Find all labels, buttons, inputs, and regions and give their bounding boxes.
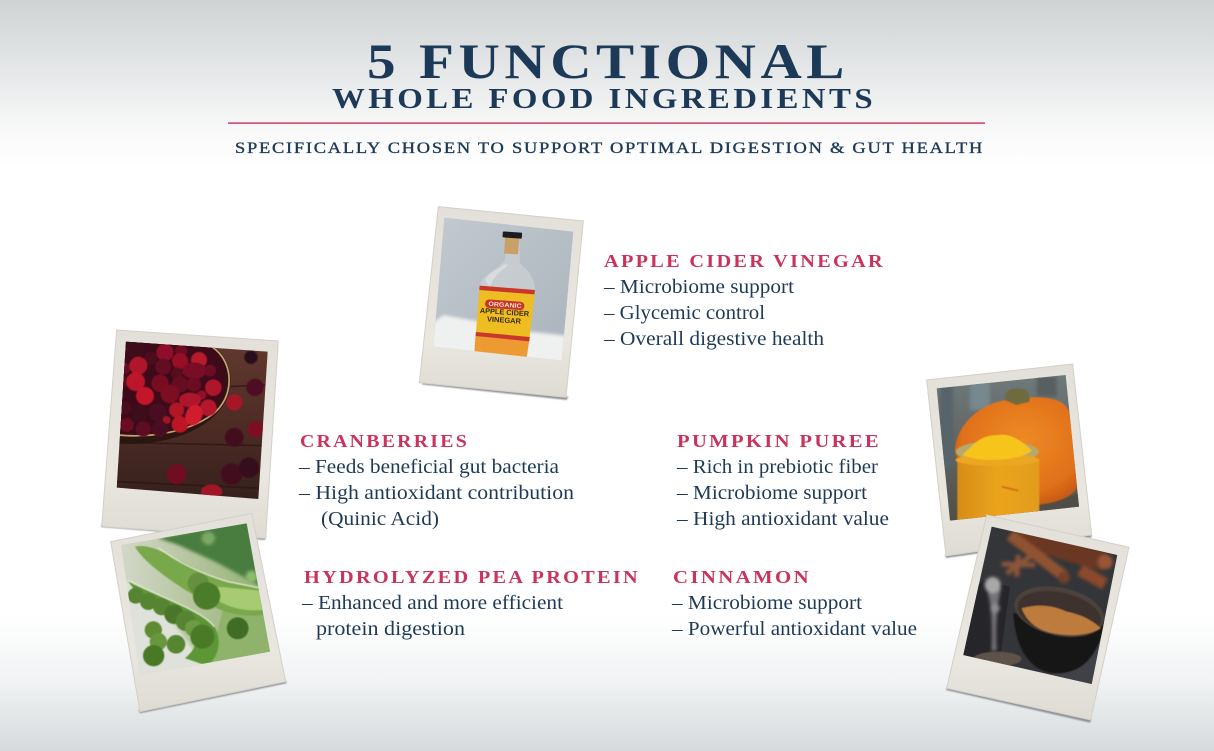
benefits list: – Microbiome support bbox=[676, 482, 867, 504]
heading: PUMPKIN PUREE bbox=[677, 431, 881, 451]
benefits list bbox=[671, 592, 917, 640]
header rule bbox=[228, 122, 985, 124]
benefits list: protein digestion bbox=[316, 618, 465, 640]
ingredient: cinnamon bbox=[671, 567, 917, 640]
heading: HYDROLYZED PEA PROTEIN bbox=[304, 567, 640, 587]
benefits list: – High antioxidant value bbox=[676, 508, 889, 530]
benefits list bbox=[298, 456, 574, 530]
benefits list: – Rich in prebiotic fiber bbox=[676, 456, 878, 478]
label text: VINEGAR bbox=[487, 314, 522, 326]
label text: APPLE CIDER bbox=[480, 306, 530, 318]
photo: pumpkin puree bbox=[927, 364, 1092, 558]
benefits list: – Microbiome support bbox=[603, 276, 794, 298]
label text: ORGANIC bbox=[488, 301, 522, 310]
benefits list: – Feeds beneficial gut bacteria bbox=[298, 456, 559, 478]
benefits list: – Overall digestive health bbox=[603, 328, 824, 350]
photo: apple cider vinegar bbox=[419, 207, 583, 400]
header bbox=[228, 33, 985, 157]
benefits list: – Enhanced and more efficient bbox=[301, 592, 563, 614]
benefits list bbox=[676, 456, 889, 530]
benefits list: – Microbiome support bbox=[671, 592, 862, 614]
ingredient: cranberries bbox=[298, 431, 574, 530]
photo: cinnamon bbox=[946, 515, 1129, 723]
bottle bbox=[474, 231, 535, 357]
photo: peas bbox=[111, 513, 287, 713]
benefits list: – Powerful antioxidant value bbox=[671, 618, 917, 640]
photo: cranberries bbox=[101, 330, 278, 540]
heading: APPLE CIDER VINEGAR bbox=[604, 251, 885, 271]
heading: CINNAMON bbox=[673, 567, 811, 587]
ingredient: hydrolyzed pea protein bbox=[301, 567, 640, 640]
title: 5 FUNCTIONAL bbox=[367, 33, 849, 89]
ingredient: apple cider vinegar bbox=[603, 251, 885, 350]
subtitle: WHOLE FOOD INGREDIENTS bbox=[332, 83, 876, 115]
label text bbox=[480, 300, 529, 324]
benefits list bbox=[301, 592, 563, 640]
benefits list: (Quinic Acid) bbox=[321, 508, 439, 530]
benefits list bbox=[603, 276, 824, 350]
ingredient: pumpkin puree bbox=[676, 431, 889, 530]
heading: CRANBERRIES bbox=[300, 431, 469, 451]
tagline: SPECIFICALLY CHOSEN TO SUPPORT OPTIMAL DIGESTION & GUT HEALTH bbox=[235, 140, 984, 157]
benefits list: – High antioxidant contribution bbox=[298, 482, 574, 504]
benefits list: – Glycemic control bbox=[603, 302, 765, 324]
